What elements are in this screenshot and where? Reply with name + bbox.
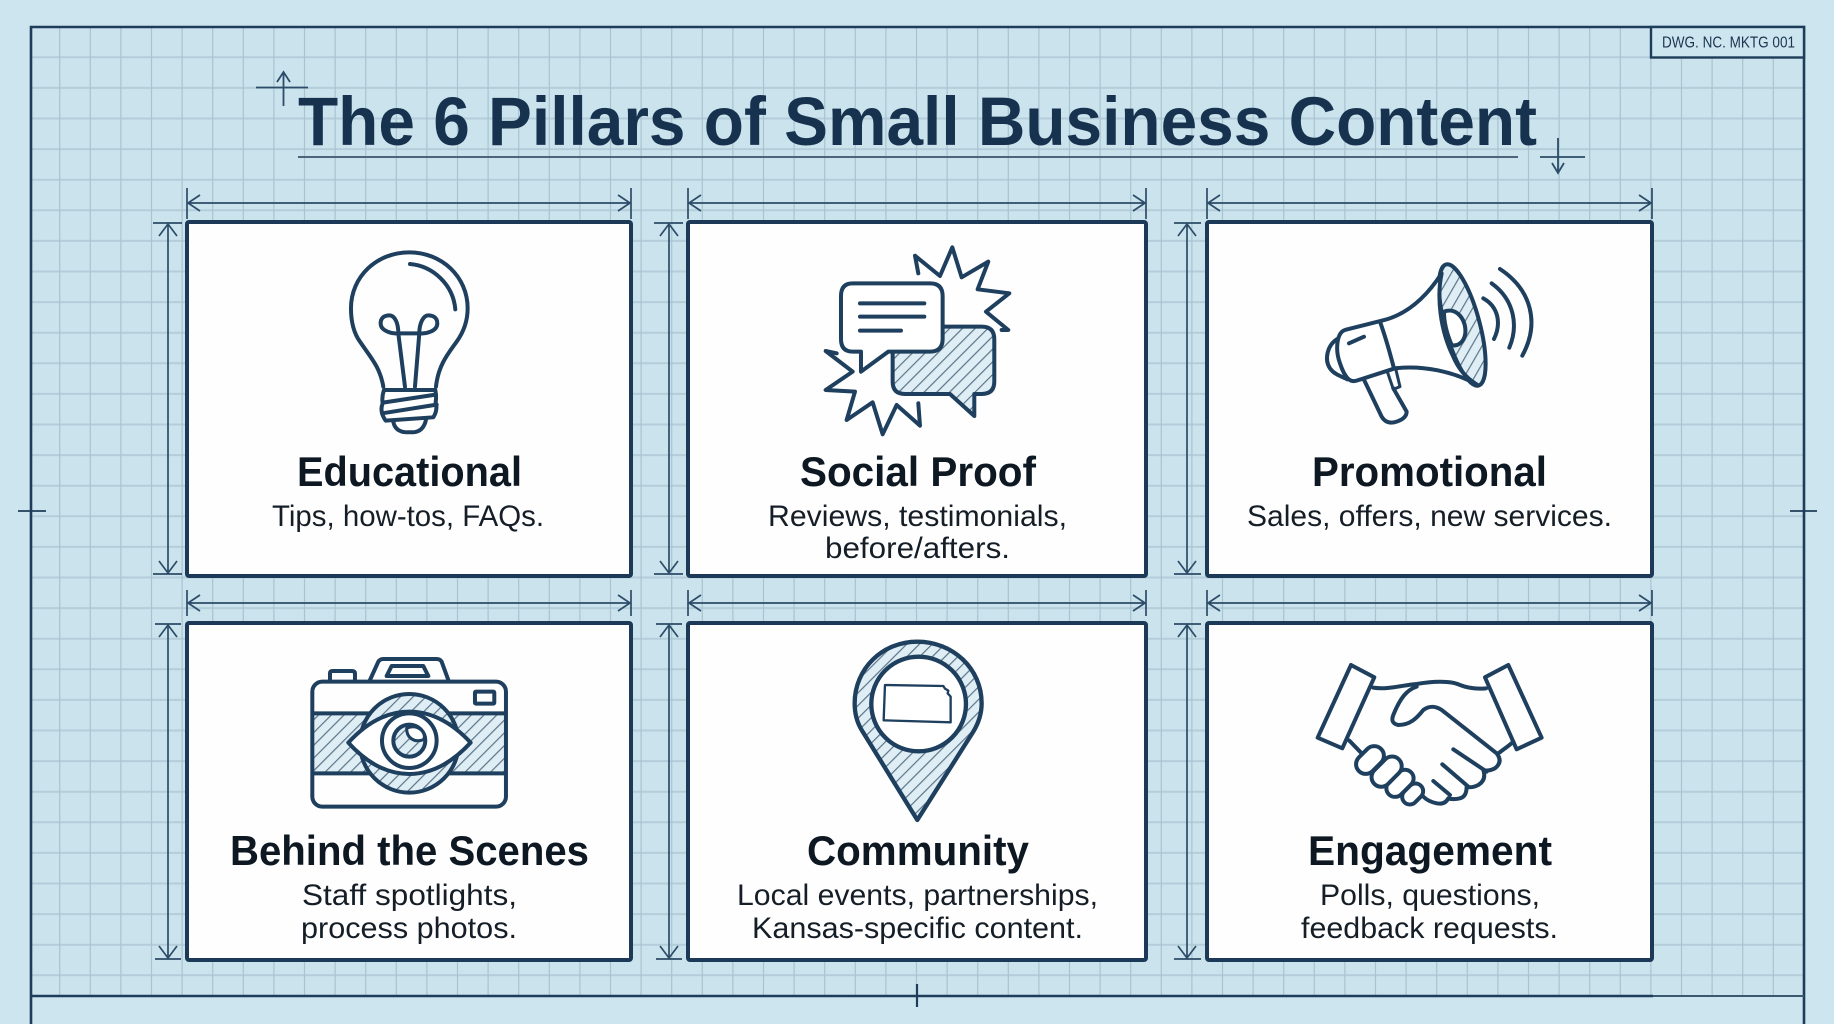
title mark: up arrow <box>256 72 308 106</box>
description: Sales, offers, new services. <box>1247 500 1612 533</box>
icon: handshake <box>1318 665 1542 808</box>
description: Polls, questions, <box>1320 879 1540 912</box>
description: Staff spotlights, <box>302 879 517 912</box>
panel: Behind the Scenes <box>187 623 631 960</box>
drawing number box <box>1651 27 1804 58</box>
icon: light bulb <box>351 252 468 432</box>
card frame <box>1207 222 1652 576</box>
description: Kansas-specific content. <box>752 912 1083 945</box>
panel: Engagement <box>1207 623 1652 960</box>
description: feedback requests. <box>1301 912 1558 945</box>
description: before/afters. <box>825 532 1010 565</box>
description: Reviews, testimonials, <box>768 500 1067 533</box>
title mark: down arrow <box>1540 138 1585 173</box>
drawing number box: DWG. NC. MKTG 001 <box>1662 34 1795 52</box>
icon: camera with eye <box>312 659 506 807</box>
card frame <box>688 623 1146 960</box>
panel: Social Proof <box>688 222 1146 576</box>
description: process photos. <box>301 912 517 945</box>
panel: Promotional <box>1207 222 1652 576</box>
card frame <box>688 222 1146 576</box>
dimension arrows: bottom row <box>155 590 1652 959</box>
heading: Promotional <box>1312 448 1547 495</box>
heading: Educational <box>297 448 522 495</box>
title: The 6 Pillars of Small Business Content <box>298 83 1537 160</box>
description <box>768 500 1067 565</box>
heading: Engagement <box>1308 827 1552 874</box>
heading: Social Proof <box>800 448 1037 495</box>
card frame <box>1207 623 1652 960</box>
description <box>301 879 517 945</box>
dimension arrows: top row <box>153 188 1652 574</box>
description <box>1301 879 1558 945</box>
heading: Behind the Scenes <box>230 827 589 874</box>
card frame <box>187 623 631 960</box>
description: Local events, partnerships, <box>737 879 1098 912</box>
icon: megaphone <box>1327 260 1531 423</box>
panel: Community <box>688 623 1146 960</box>
heading: Community <box>807 827 1030 874</box>
card frame <box>187 222 631 576</box>
description <box>737 879 1098 945</box>
panel: Educational <box>187 222 631 576</box>
icon: map pin with Kansas outline <box>855 642 982 820</box>
icon: speech bubbles with starbursts <box>826 247 1009 434</box>
title underline <box>298 156 1518 158</box>
description: Tips, how-tos, FAQs. <box>272 500 544 533</box>
